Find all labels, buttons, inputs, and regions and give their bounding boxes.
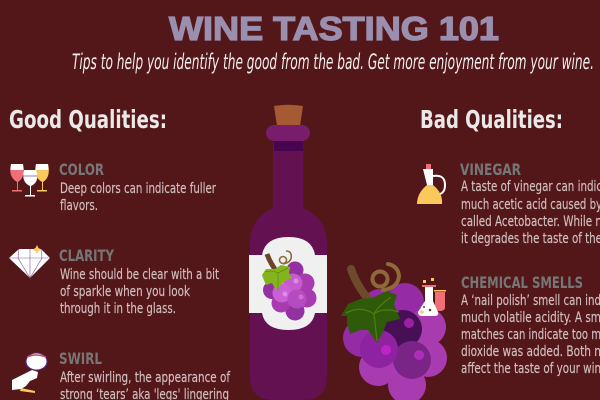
bottle label <box>249 237 327 330</box>
text: swirl <box>59 349 230 400</box>
text: swirl: SWIRL <box>59 349 102 368</box>
text: clarity <box>59 246 219 317</box>
text: clarity: Wine should be clear with a bit <box>60 267 219 283</box>
bottle lip <box>266 125 310 141</box>
icon: wine glasses <box>10 164 49 196</box>
text: clarity: of sparkle when you look <box>60 284 191 300</box>
large grape bunch <box>343 283 447 400</box>
icon: vinegar cruet <box>417 164 445 204</box>
large vine and tendril <box>351 264 399 305</box>
text: color: Deep colors can indicate fuller <box>60 181 217 197</box>
large leaf <box>341 291 400 343</box>
icon: swirling hand and glass <box>12 353 47 393</box>
wine bottle <box>249 105 327 400</box>
text: color: flavors. <box>60 198 98 214</box>
text: color: COLOR <box>59 160 104 179</box>
text: vinegar <box>460 160 600 247</box>
icon: diamond <box>9 245 50 278</box>
text: swirl: After swirling, the appearance of <box>60 370 230 386</box>
text: clarity: CLARITY <box>59 246 114 265</box>
text: chemical smells <box>461 273 600 377</box>
heading: good qualities: Good Qualities: <box>9 105 167 134</box>
title: WINE TASTING 101 <box>169 10 499 47</box>
heading: bad qualities: Bad Qualities: <box>420 105 563 134</box>
text: clarity: through it in the glass. <box>60 301 176 317</box>
icon: flask and test tube <box>418 278 446 316</box>
small leaf and vine <box>262 251 292 290</box>
bottle cork <box>274 105 303 126</box>
bottle body <box>250 140 327 400</box>
text: color <box>59 160 217 214</box>
small grapes <box>263 262 316 320</box>
text: vinegar: VINEGAR <box>460 160 521 179</box>
